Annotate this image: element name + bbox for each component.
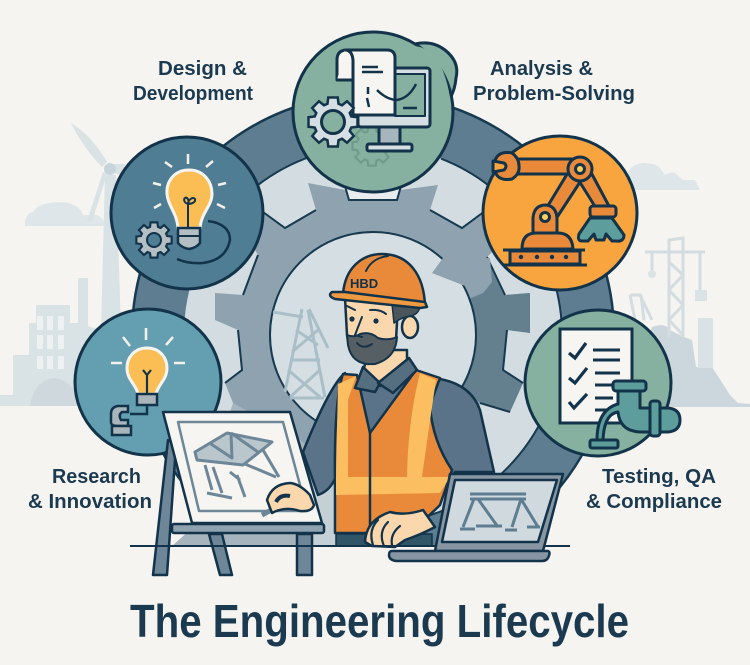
engineer: facial features [347,306,386,347]
engineer: ear [402,316,418,338]
background skyline: left wind turbine and city [0,123,125,406]
easel: ledge [172,524,324,533]
icon: water faucet [590,381,680,448]
icon: light bulb [127,348,167,405]
label: analysis and problem-solving: Problem-Solving [473,83,635,105]
icon: gear [136,222,172,258]
label: design and development: Design & [158,58,247,80]
icon circle: research and innovation [75,309,221,455]
label: analysis and problem-solving: Analysis & [490,58,593,80]
laptop: screen [442,480,557,542]
icon: faint gear outline [352,126,392,166]
laptop: truss sketch [460,494,540,530]
label: design and development: Development [133,83,253,105]
icon: device with wire [111,405,147,435]
engineer: drawing hand with pen [262,483,314,515]
icon circle: design and development [111,137,263,289]
centre gear hub [270,232,476,438]
background skyline: right crane and factory [620,163,750,407]
laptop: base [389,551,550,561]
background oil derrick [273,309,328,398]
icon circle: analysis and problem-solving [293,32,457,192]
title: The Engineering Lifecycle [130,595,629,647]
engineer: trousers [336,534,432,546]
gear tooth overlapping hub [432,258,492,293]
icon circle: robot arm [483,136,637,290]
engineer: hard hat [330,254,427,308]
ground line [130,545,570,547]
outer gear ring [132,94,614,576]
easel: drawing board [163,412,322,523]
icon: light rays [111,328,185,363]
engineer: collar [355,358,417,393]
icon: gear [308,98,358,146]
icon: light bulb [167,170,212,249]
middle gear [215,183,530,444]
label: testing, QA and compliance: & Compliance [586,491,722,513]
label: research and innovation: Research [52,466,141,488]
icon: checklist [560,329,632,423]
engineer: arms and shirt [303,373,494,512]
icon: robot arm [493,153,624,265]
backdrop behind engineer and easel [172,403,336,546]
gear top notch [345,186,401,200]
laptop: lid [435,474,563,551]
engineer: beard [347,333,397,364]
icon: wire [177,221,230,263]
engineer: neck [362,350,407,386]
icon: light rays [153,154,226,208]
engineer: right hand [365,510,435,547]
engineer figure [303,254,494,547]
easel: legs [153,440,312,575]
engineer: high-visibility vest [335,370,452,533]
laptop [389,474,563,561]
easel: structural sketch [195,433,279,498]
gear outline strokes [225,210,523,412]
icon: paper document [337,50,417,115]
gear dark right section [464,267,530,412]
light panel below the arm [308,484,336,546]
icon: monitor [358,68,430,151]
icon circle: testing, QA and compliance [525,310,680,456]
engineer: hair [392,304,420,323]
engineer: face [345,298,398,364]
label: testing, QA and compliance: Testing, QA [602,466,716,488]
drafting easel [153,412,324,575]
label: research and innovation: & Innovation [28,491,152,513]
hat label: HBD [350,276,378,291]
